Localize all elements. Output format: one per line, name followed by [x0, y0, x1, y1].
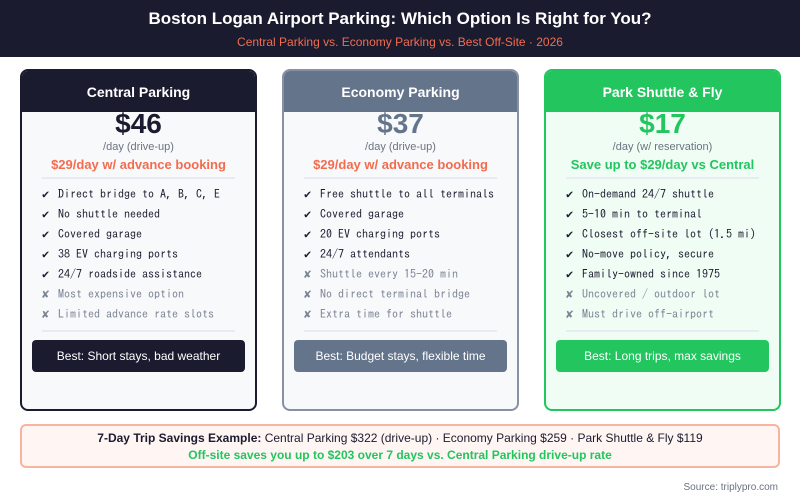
features: central: [42, 188, 220, 320]
features: economy: Shuttle every 15-20 min: [320, 268, 458, 280]
features: shuttle: On-demand 24/7 shuttle: [582, 188, 714, 200]
panel: park shuttle & fly: /day (w/ reservation): [613, 141, 712, 153]
best for: shuttle: [556, 340, 769, 372]
features: central: ✔: [42, 268, 49, 280]
features: economy: 20 EV charging ports: [320, 228, 440, 240]
features: central: ✔: [42, 228, 49, 240]
title: Boston Logan Airport Parking: Which Option Is Right for You?: [148, 9, 652, 28]
features: economy: Extra time for shuttle: [320, 308, 452, 320]
features: economy: ✔: [304, 188, 311, 200]
features: economy: Free shuttle to all terminals: [320, 188, 494, 200]
features: economy: ✘: [304, 288, 311, 300]
best for: economy: [294, 340, 507, 372]
features: central: 24/7 roadside assistance: [58, 268, 202, 280]
panel: central parking: $29/day w/ advance booking: [51, 157, 226, 172]
panel: central parking: [20, 69, 257, 411]
features: shuttle: ✘: [566, 288, 573, 300]
best for: shuttle: Best: Long trips, max savings: [584, 349, 741, 363]
card header: central: Central Parking: [87, 84, 190, 100]
features: economy: ✔: [304, 208, 311, 220]
features: shuttle: ✔: [566, 268, 573, 280]
price: economy: $37: [377, 108, 424, 139]
features: central: Direct bridge to A, B, C, E: [58, 188, 220, 200]
features: central: Covered garage: [58, 228, 142, 240]
features: economy: 24/7 attendants: [320, 248, 410, 260]
features: economy: ✔: [304, 228, 311, 240]
features: shuttle: Family-owned since 1975: [582, 268, 720, 280]
features: economy: No direct terminal bridge: [320, 288, 470, 300]
features: shuttle: Must drive off-airport: [582, 308, 714, 320]
source: Source: triplypro.com: [684, 482, 778, 493]
features: central: 38 EV charging ports: [58, 248, 178, 260]
card header: economy: [284, 71, 517, 112]
features: shuttle: Uncovered / outdoor lot: [582, 288, 720, 300]
panel: economy parking: $29/day w/ advance booking: [313, 157, 488, 172]
features: shuttle: ✔: [566, 228, 573, 240]
features: central: Most expensive option: [58, 288, 184, 300]
best for: economy: Best: Budget stays, flexible time: [315, 349, 486, 363]
features: shuttle: 5-10 min to terminal: [582, 208, 702, 220]
card header: economy: Economy Parking: [341, 84, 460, 100]
features: economy: ✘: [304, 308, 311, 320]
features: shuttle: ✔: [566, 208, 573, 220]
features: central: ✔: [42, 248, 49, 260]
features: economy: ✘: [304, 268, 311, 280]
features: economy: [304, 188, 494, 320]
subtitle: Central Parking vs. Economy Parking vs. Best Off-Site · 2026: [237, 35, 563, 49]
features: central: ✘: [42, 308, 49, 320]
savings callout: [20, 424, 780, 468]
panel: central parking: /day (drive-up): [103, 141, 174, 153]
header banner: [0, 0, 800, 57]
features: shuttle: ✔: [566, 188, 573, 200]
panel: economy parking: /day (drive-up): [365, 141, 436, 153]
savings callout: 7-Day Trip Savings Example: Central Parking $322 (drive-up) · Economy Parking $259 · Park Shuttle & Fly $119: [97, 431, 703, 445]
features: shuttle: ✔: [566, 248, 573, 260]
features: central: Limited advance rate slots: [58, 308, 214, 320]
card header: shuttle: Park Shuttle & Fly: [603, 84, 722, 100]
features: central: ✘: [42, 288, 49, 300]
best for: central: [32, 340, 245, 372]
best for: central: Best: Short stays, bad weather: [57, 349, 220, 363]
features: economy: ✔: [304, 248, 311, 260]
features: central: ✔: [42, 208, 49, 220]
features: shuttle: Closest off-site lot (1.5 mi): [582, 228, 756, 240]
price: central: $46: [115, 108, 162, 139]
features: shuttle: No-move policy, secure: [582, 248, 714, 260]
panel: park shuttle & fly: Save up to $29/day vs Central: [571, 157, 754, 172]
features: shuttle: [566, 188, 756, 320]
features: economy: Covered garage: [320, 208, 404, 220]
features: shuttle: ✘: [566, 308, 573, 320]
features: central: ✔: [42, 188, 49, 200]
savings callout: Off-site saves you up to $203 over 7 days vs. Central Parking drive-up rate: [188, 448, 612, 462]
card header: central: [22, 71, 255, 112]
panel: economy parking: [282, 69, 519, 411]
card header: shuttle: [546, 71, 779, 112]
price: shuttle: $17: [639, 108, 686, 139]
features: central: No shuttle needed: [58, 208, 160, 220]
panel: park shuttle & fly: [544, 69, 781, 411]
